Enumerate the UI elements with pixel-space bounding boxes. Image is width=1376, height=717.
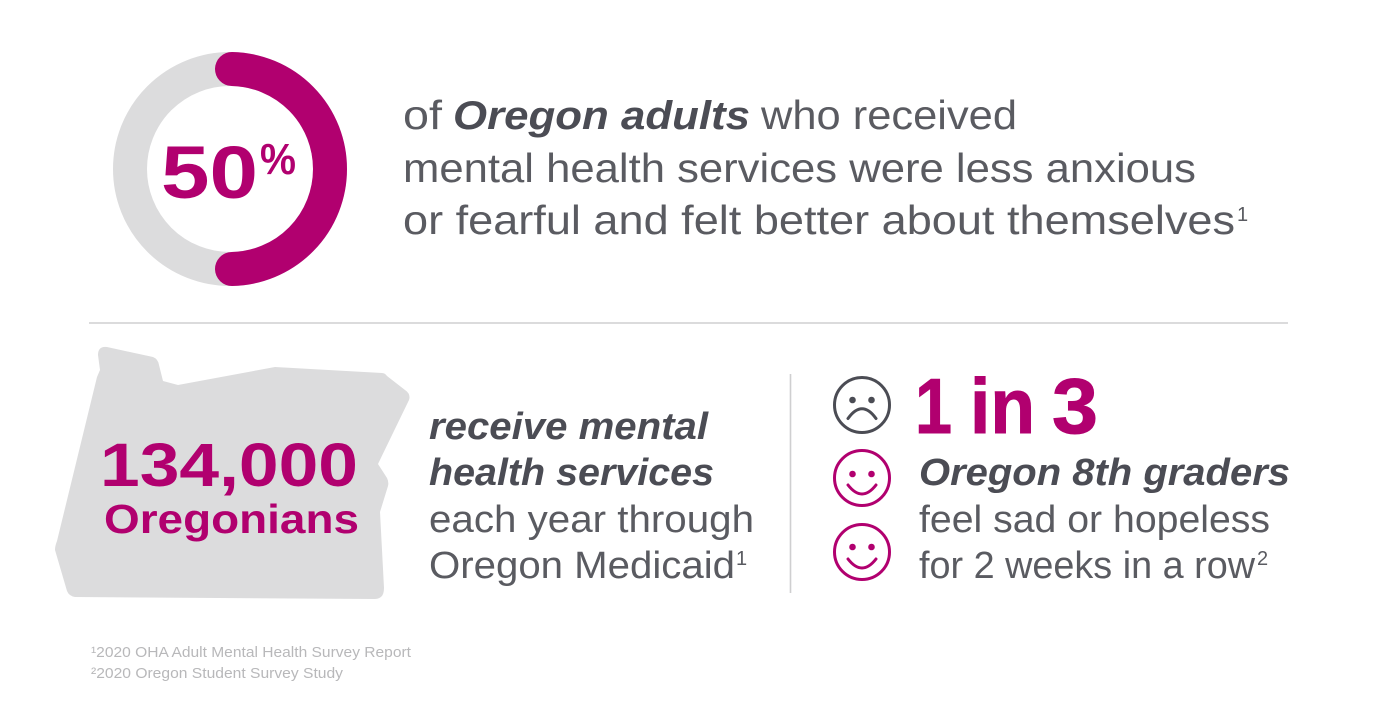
statement: Oregon adults: of [403, 92, 443, 138]
headline: 1 in 3: 3 [1052, 362, 1098, 450]
footnotes: ¹2020 OHA Adult Mental Health Survey Report [91, 644, 412, 661]
icon: happy face 2 [834, 524, 890, 580]
statement: Oregon adults: who received [760, 92, 1017, 138]
statement: Oregon adults: or fearful and felt better about themselves [403, 197, 1235, 243]
statement: Medicaid services: each year through [429, 499, 754, 541]
Oregon map with 134,000 Oregonians: Oregonians [104, 496, 359, 542]
donut chart: 50%: 50 [161, 131, 258, 214]
icon: sad face [834, 378, 890, 432]
statement: Medicaid services [429, 406, 754, 587]
statement: Oregon adults: mental health services were less anxious [403, 145, 1196, 191]
statement: Oregon adults [403, 92, 1248, 243]
footnotes [91, 644, 412, 682]
statement: Medicaid services: Oregon Medicaid [429, 545, 735, 587]
statement: Medicaid services: receive mental [429, 406, 710, 448]
Oregon map with 134,000 Oregonians [55, 347, 410, 599]
headline: 1 in 3: 1 [915, 362, 952, 450]
statement: Oregon 8th graders: 2 [1257, 548, 1268, 570]
statement: Oregon 8th graders: Oregon 8th graders [919, 452, 1290, 494]
statement: Medicaid services: health services [429, 452, 714, 494]
statement: Oregon 8th graders [919, 452, 1290, 587]
headline: 1 in 3 [915, 362, 1098, 450]
statement: Oregon adults: 1 [1237, 204, 1248, 226]
statement: Oregon 8th graders: for 2 weeks in a row [919, 545, 1256, 587]
statement: Oregon 8th graders: feel sad or hopeless [919, 499, 1270, 541]
statement: Medicaid services: 1 [736, 548, 747, 570]
footnotes: ²2020 Oregon Student Survey Study [91, 665, 344, 682]
donut chart: 50% [130, 69, 330, 269]
icon: happy face 1 [834, 450, 890, 506]
donut chart: 50%: % [260, 135, 296, 184]
Oregon map with 134,000 Oregonians: 134,000 [100, 431, 358, 499]
headline: 1 in 3: in [970, 362, 1035, 450]
statement: Oregon adults: Oregon adults [453, 94, 750, 138]
